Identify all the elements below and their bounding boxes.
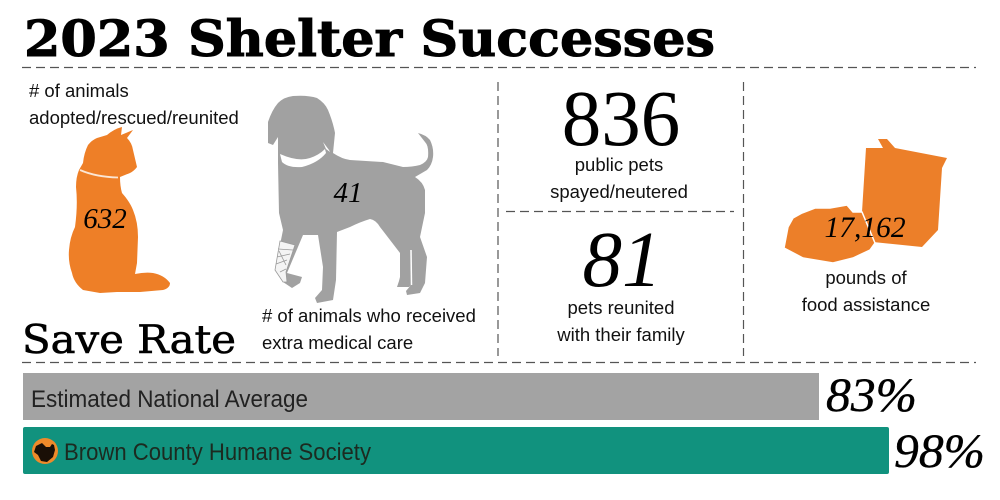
number: 632: 632 [83,203,127,235]
heading: save rate: Save Rate [22,318,236,363]
panel: animals adopted [29,80,239,293]
text: medical care label: extra medical care [262,332,413,353]
bar: brown county humane society: Brown County Humane Society [64,439,371,466]
number: 81: 81 [582,217,662,304]
text: adopted label: adopted/rescued/reunited [29,107,239,128]
icon: food bag and bowl [784,139,947,263]
text: spayed label: spayed/neutered [550,181,688,202]
text: spayed label: public pets [575,154,663,175]
text: medical care label: # of animals who received [262,305,476,326]
icon: humane society logo [32,438,58,464]
value: 98%: 98% [894,425,985,478]
title: 2023 Shelter Successes [24,9,715,68]
icon: orange cat [69,127,170,293]
text: medical care label [262,305,476,353]
text: spayed label [550,154,688,202]
icon: grey dog with bandaged leg [268,96,433,303]
text: adopted label [29,80,239,128]
panel: extra medical care [262,96,476,353]
number: 17,162: 17,162 [824,212,906,244]
bar: estimated national average: Estimated National Average [31,386,308,413]
bar: brown county humane society [23,427,889,474]
text: adopted label: # of animals [29,80,129,101]
panel: pets reunited [556,217,685,345]
value: 83%: 83% [826,369,917,422]
text: reunited label: pets reunited [568,297,674,318]
text: reunited label [556,297,685,345]
number: 836: 836 [562,76,680,163]
number: 41: 41 [334,177,362,209]
text: reunited label: with their family [556,324,685,345]
text: food label: food assistance [802,294,930,315]
panel: food assistance [784,139,947,315]
text: food label [802,267,930,315]
text: food label: pounds of [825,267,907,288]
bar: estimated national average [23,373,819,420]
panel: spayed neutered [550,76,688,202]
